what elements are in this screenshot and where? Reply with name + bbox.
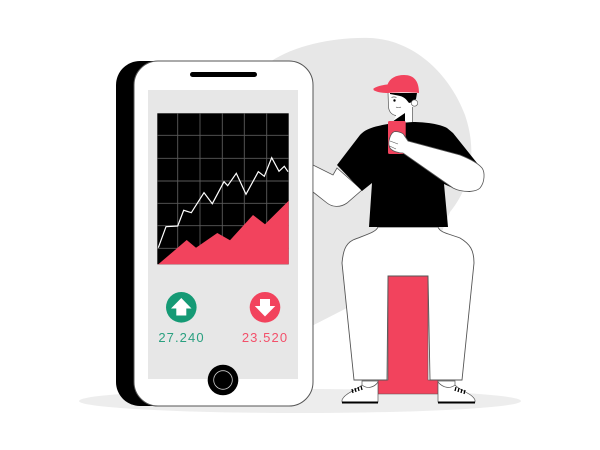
hair (390, 93, 417, 103)
background blob (270, 38, 471, 332)
phone (116, 61, 313, 406)
red stool (378, 276, 438, 394)
home button (208, 365, 238, 395)
head and neck (388, 92, 418, 122)
ear (411, 100, 418, 106)
left shoe (342, 381, 378, 404)
ground shadow (79, 389, 521, 413)
person (313, 75, 484, 404)
speaker (190, 72, 257, 77)
black t-shirt (337, 122, 481, 227)
handheld phone (388, 121, 406, 154)
phone body (134, 61, 313, 406)
value: up: 27.240 (158, 330, 205, 345)
stock chart (157, 113, 289, 264)
right arm and hand (389, 132, 484, 191)
phone back (116, 61, 236, 406)
white line series (158, 158, 288, 248)
value: down: 23.520 (242, 330, 288, 345)
trousers (342, 227, 474, 380)
right shoe (438, 381, 475, 404)
phone screen (148, 90, 298, 379)
left arm (313, 165, 362, 206)
neck shadow (393, 113, 405, 122)
icon: green up arrow (166, 292, 197, 323)
red cap (374, 75, 419, 93)
eye (393, 99, 396, 102)
icon: red down arrow (250, 292, 280, 323)
red area series (158, 201, 289, 264)
